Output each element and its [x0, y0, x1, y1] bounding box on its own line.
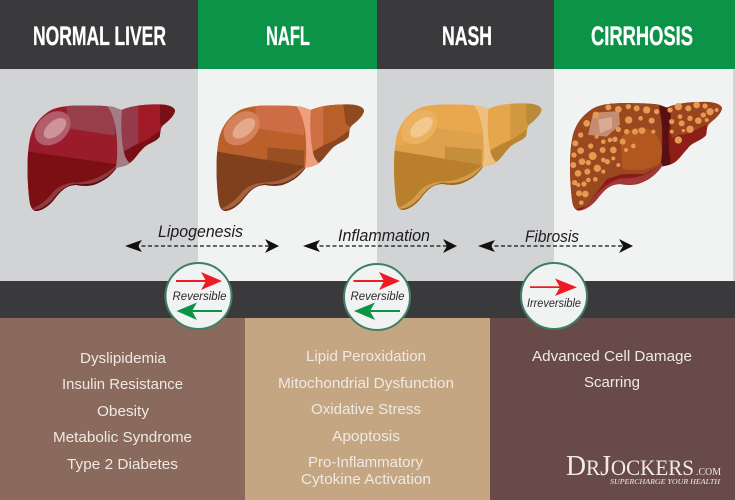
bottom panel: cirrhosis effects: Advanced Cell Damage: [532, 349, 692, 365]
bottom panel: causes of NAFL: Insulin Resistance: [62, 377, 183, 393]
background panels: [0, 69, 735, 281]
bottom panel: NASH mechanisms: [245, 318, 490, 500]
bottom panel: NASH mechanisms: Pro-Inflammatory: [308, 455, 424, 471]
icon: reversible badge 2: [344, 264, 410, 330]
icon: NAFL liver: [216, 104, 364, 211]
logo: DrJockers.com: DRJOCKERS: [566, 450, 694, 482]
bottom panel: causes of NAFL: [0, 318, 245, 500]
arrow: inflammation: [303, 227, 457, 253]
icon: normal liver: [28, 104, 175, 211]
icon: NASH liver: [394, 103, 542, 210]
dark band: [0, 281, 735, 318]
bottom panel: causes of NAFL: Obesity: [97, 404, 150, 420]
icon: reversible badge 2: Reversible: [350, 291, 404, 303]
icon: irreversible badge: Irreversible: [527, 298, 581, 310]
bottom panel: causes of NAFL: Type 2 Diabetes: [67, 457, 178, 473]
logo: DrJockers.com: SUPERCHARGE YOUR HEALTH: [610, 477, 721, 486]
icon: cirrhosis liver: [570, 102, 722, 211]
header: stage titles: NASH: [442, 21, 492, 51]
header: stage titles: NORMAL LIVER: [33, 21, 166, 51]
header: stage titles: NAFL: [266, 21, 310, 51]
bottom panel: NASH mechanisms: Mitochondrial Dysfunction: [278, 376, 454, 392]
logo: DrJockers.com: .COM: [696, 467, 721, 478]
arrow: fibrosis: Fibrosis: [525, 228, 579, 246]
bottom panel: cirrhosis effects: Scarring: [584, 375, 640, 391]
bottom panel: NASH mechanisms: Cytokine Activation: [301, 472, 431, 488]
icon: reversible badge 1: [166, 263, 232, 329]
bottom panel: causes of NAFL: Dyslipidemia: [80, 351, 167, 367]
arrow: fibrosis: [478, 228, 633, 253]
arrow: lipogenesis: [125, 223, 279, 253]
icon: irreversible badge: [521, 263, 587, 329]
bottom panel: NASH mechanisms: Apoptosis: [332, 429, 400, 445]
bottom panel: NASH mechanisms: Oxidative Stress: [311, 402, 421, 418]
bottom panel: cirrhosis effects: [490, 318, 735, 500]
bottom panel: causes of NAFL: Metabolic Syndrome: [53, 430, 192, 446]
arrow: inflammation: Inflammation: [338, 227, 430, 245]
icon: reversible badge 1: Reversible: [172, 291, 226, 303]
bottom panel: NASH mechanisms: Lipid Peroxidation: [306, 349, 426, 365]
header: stage titles: [0, 0, 735, 69]
arrow: lipogenesis: Lipogenesis: [158, 223, 243, 241]
